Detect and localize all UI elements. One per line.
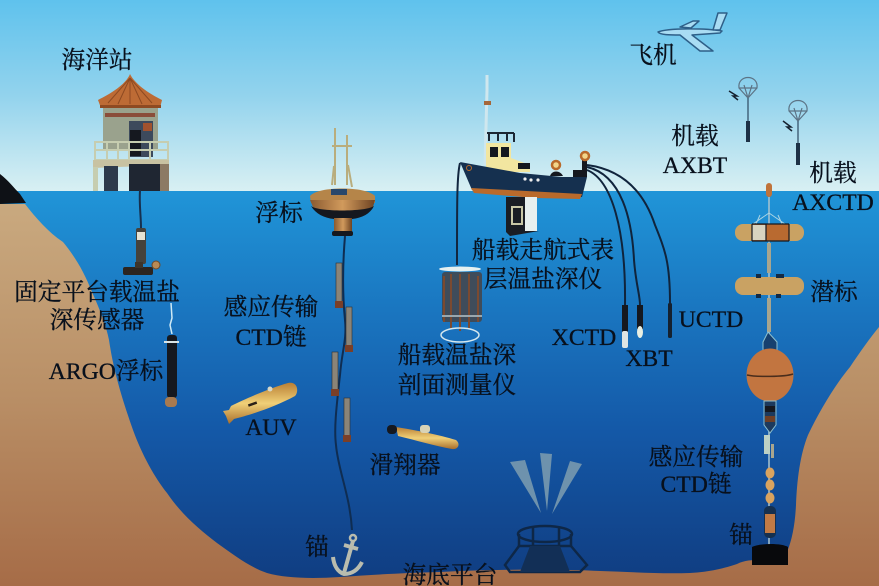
label: AXBT: AXBT	[663, 153, 728, 179]
cage below sphere	[764, 401, 776, 433]
label: profiler line 2: 剖面测量仪	[398, 372, 516, 399]
platform frame	[505, 526, 587, 572]
parachute AXBT	[729, 78, 757, 142]
acoustic release	[764, 506, 776, 538]
underway CTD instrument	[506, 197, 539, 236]
label: fixed platform sensor: 固定平台载温盐	[14, 279, 180, 306]
fixed platform sensor	[123, 190, 160, 275]
orange sphere	[746, 348, 794, 402]
label: ARGO: ARGO浮标	[49, 358, 165, 385]
XCTD probe	[622, 305, 628, 348]
black coastal rock	[0, 174, 26, 204]
seabed and coasts	[0, 204, 879, 586]
ocean station	[93, 74, 169, 191]
parachute AXCTD	[783, 100, 807, 165]
lower sensors	[764, 435, 770, 454]
label: underway CTD: 船载走航式表	[472, 237, 614, 264]
label: CTD chain right: 感应传输	[649, 444, 743, 471]
glider	[387, 425, 459, 449]
label: CTD chain line 2: CTD链	[235, 324, 307, 351]
cage above sphere	[763, 332, 777, 350]
surface marker	[766, 183, 772, 197]
station balcony	[95, 142, 168, 160]
label: UCTD: UCTD	[679, 307, 743, 333]
subsurface mooring	[735, 183, 804, 565]
label: XCTD: XCTD	[552, 325, 616, 351]
radio signal	[729, 91, 738, 100]
label: airborne AXBT: 机载	[671, 123, 719, 150]
station roof	[98, 74, 162, 108]
surface buoy	[310, 128, 375, 236]
label: AUV: AUV	[245, 415, 297, 441]
research ship	[460, 75, 589, 199]
airplane	[658, 13, 727, 51]
ship winches	[550, 172, 563, 176]
acoustic beams	[510, 453, 582, 514]
label: anchor right: 锚	[729, 522, 753, 549]
label: XBT: XBT	[625, 346, 673, 372]
lowering wire	[457, 163, 460, 265]
UCTD probe	[668, 303, 672, 338]
mooring line	[768, 197, 770, 545]
label: CTD chain right line 2: CTD链	[660, 471, 732, 498]
label: ocean station: 海洋站	[61, 47, 133, 74]
seabed platform	[505, 453, 587, 572]
buoy hull	[310, 188, 375, 203]
ship cabin	[486, 143, 530, 172]
label: anchor left: 锚	[305, 534, 329, 561]
buoyancy beads	[766, 468, 774, 478]
anchor	[333, 535, 362, 574]
mooring anchor weight	[752, 544, 788, 565]
ship mast	[485, 75, 487, 165]
AUV	[223, 383, 297, 424]
sea	[0, 191, 879, 586]
ship hull	[460, 162, 587, 197]
buoy mast	[332, 128, 352, 187]
mooring sensors	[767, 243, 771, 273]
sensor cable	[140, 190, 141, 228]
label: buoy: 浮标	[255, 200, 304, 227]
station legs	[93, 167, 98, 191]
label: AXCTD: AXCTD	[792, 190, 874, 216]
label: airplane: 飞机	[629, 42, 677, 69]
ARGO float	[164, 303, 179, 407]
XBT probe	[637, 305, 643, 338]
sky	[0, 0, 879, 192]
label: fixed platform sensor line 2: 深传感器	[50, 307, 145, 334]
label: airborne AXCTD: 机载	[809, 160, 857, 187]
chain sensors	[332, 263, 352, 436]
label: profiler: 船载温盐深	[398, 342, 517, 369]
label: CTD chain: 感应传输	[224, 294, 318, 321]
inductive CTD chain cable and anchor	[331, 236, 362, 574]
radio signal	[783, 121, 792, 131]
CTD rosette	[439, 163, 482, 342]
label: underway CTD line 2: 层温盐深仪	[484, 266, 602, 293]
expendable probe cables	[587, 165, 672, 348]
label: subsurface mooring: 潜标	[810, 279, 859, 306]
chain cable	[335, 236, 352, 530]
label: glider: 滑翔器	[369, 452, 441, 479]
station walls	[103, 108, 158, 150]
upper float	[735, 213, 804, 241]
lower float	[735, 274, 804, 298]
